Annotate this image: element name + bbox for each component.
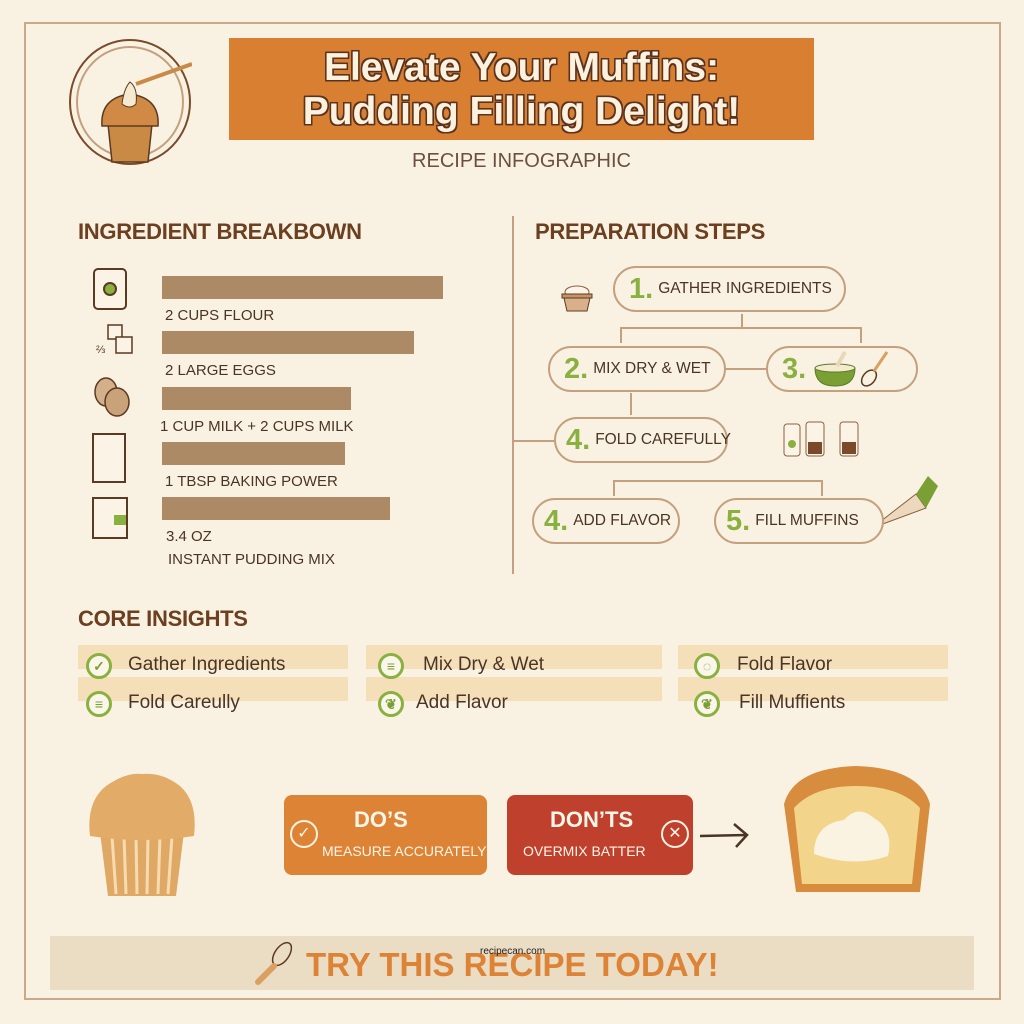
icon: whisk <box>255 942 292 985</box>
icon: list <box>86 691 112 717</box>
icon: list: ≡ <box>387 658 395 674</box>
icon: piping bag <box>884 476 938 524</box>
text: 1 CUP MILK + 2 CUPS MILK <box>160 418 354 435</box>
insights column 1: Gather Ingredients <box>128 654 285 675</box>
step 2: 2. <box>564 352 588 384</box>
step 4 fold: 4. <box>566 424 590 456</box>
call to action: TRY THIS RECIPE TODAY! <box>306 946 719 983</box>
image: cut muffin <box>784 766 930 892</box>
insights column 3: Fold Flavor <box>737 654 832 675</box>
icon: list <box>378 653 404 679</box>
step 1 <box>613 266 846 312</box>
step 4 flavor <box>532 498 680 544</box>
text: Fold Careully <box>128 692 240 713</box>
icon: flour bag <box>93 268 127 310</box>
title banner <box>229 38 814 140</box>
icon: leaf: ❦ <box>701 696 713 712</box>
do's card <box>284 795 487 875</box>
step 3: 3. <box>782 352 806 384</box>
don'ts card: DON’TS <box>550 807 633 832</box>
icon: timer: ◌ <box>703 658 711 674</box>
icon: spice bottles <box>784 422 858 456</box>
step 2: MIX DRY & WET <box>593 360 711 377</box>
icon: x circle: ✕ <box>668 825 682 842</box>
watermark: recipecan.com <box>480 946 545 957</box>
icon: milk carton <box>92 433 126 483</box>
icon: check circle <box>290 820 318 848</box>
icon: muffin logo <box>69 39 192 165</box>
footer banner <box>50 936 974 990</box>
step 4 flavor: 4. <box>544 504 568 536</box>
step 5: 5. <box>726 504 750 536</box>
icon: check <box>86 653 112 679</box>
step 1: 1. <box>629 272 653 304</box>
heading: preparation steps: PREPARATION STEPS <box>535 219 765 244</box>
step 3 <box>766 346 918 392</box>
icon: leaf: ❦ <box>385 696 397 712</box>
insights column 3 <box>678 645 948 717</box>
icon: eggs <box>94 377 130 417</box>
subtitle: RECIPE INFOGRAPHIC <box>412 150 631 172</box>
don'ts card <box>507 795 693 875</box>
step 4 fold: FOLD CAREFULLY <box>595 431 731 448</box>
flowchart: steps <box>514 286 938 524</box>
icon: check: ✓ <box>93 658 105 674</box>
icon: pudding box <box>92 497 128 539</box>
text: 3.4 OZ <box>166 528 212 545</box>
icon: cubes: ⅔ <box>96 344 105 356</box>
text: INSTANT PUDDING MIX <box>168 551 335 568</box>
insights column 2 <box>366 645 662 717</box>
icon: check circle: ✓ <box>297 825 311 842</box>
insights column 1 <box>78 645 348 717</box>
step 4 flavor: ADD FLAVOR <box>573 512 671 529</box>
do's card: MEASURE ACCURATELY <box>322 843 486 859</box>
chart: ingredient bars <box>92 268 133 539</box>
step 2 <box>548 346 726 392</box>
step 5: FILL MUFFINS <box>755 512 859 529</box>
icon: leaf <box>378 691 404 717</box>
text: Fill Muffients <box>739 692 845 713</box>
step 1: GATHER INGREDIENTS <box>658 280 832 297</box>
title banner: Elevate Your Muffins: <box>324 46 719 89</box>
text: 2 LARGE EGGS <box>165 362 276 379</box>
divider <box>512 216 514 574</box>
title banner: Pudding Filling Delight! <box>303 90 740 133</box>
insights column 2: Mix Dry & Wet <box>423 654 544 675</box>
don'ts card: OVERMIX BATTER <box>523 843 646 859</box>
step 5 <box>714 498 884 544</box>
text: Add Flavor <box>416 692 508 713</box>
icon: leaf <box>694 691 720 717</box>
text: 1 TBSP BAKING POWER <box>165 473 338 490</box>
icon: cubes <box>96 324 133 356</box>
text: 2 CUPS FLOUR <box>165 307 274 324</box>
heading: ingredient breakdown: INGREDIENT BREAKBOWN <box>78 219 362 244</box>
step 4 fold <box>554 417 728 463</box>
do's card: DO’S <box>354 807 408 832</box>
icon: timer <box>694 653 720 679</box>
icon: x circle <box>661 820 689 848</box>
image: whole muffin <box>89 774 195 896</box>
icon: list: ≡ <box>95 696 103 712</box>
heading: core insights: CORE INSIGHTS <box>78 606 248 631</box>
icon: basket <box>562 286 592 312</box>
arrow <box>700 823 749 848</box>
